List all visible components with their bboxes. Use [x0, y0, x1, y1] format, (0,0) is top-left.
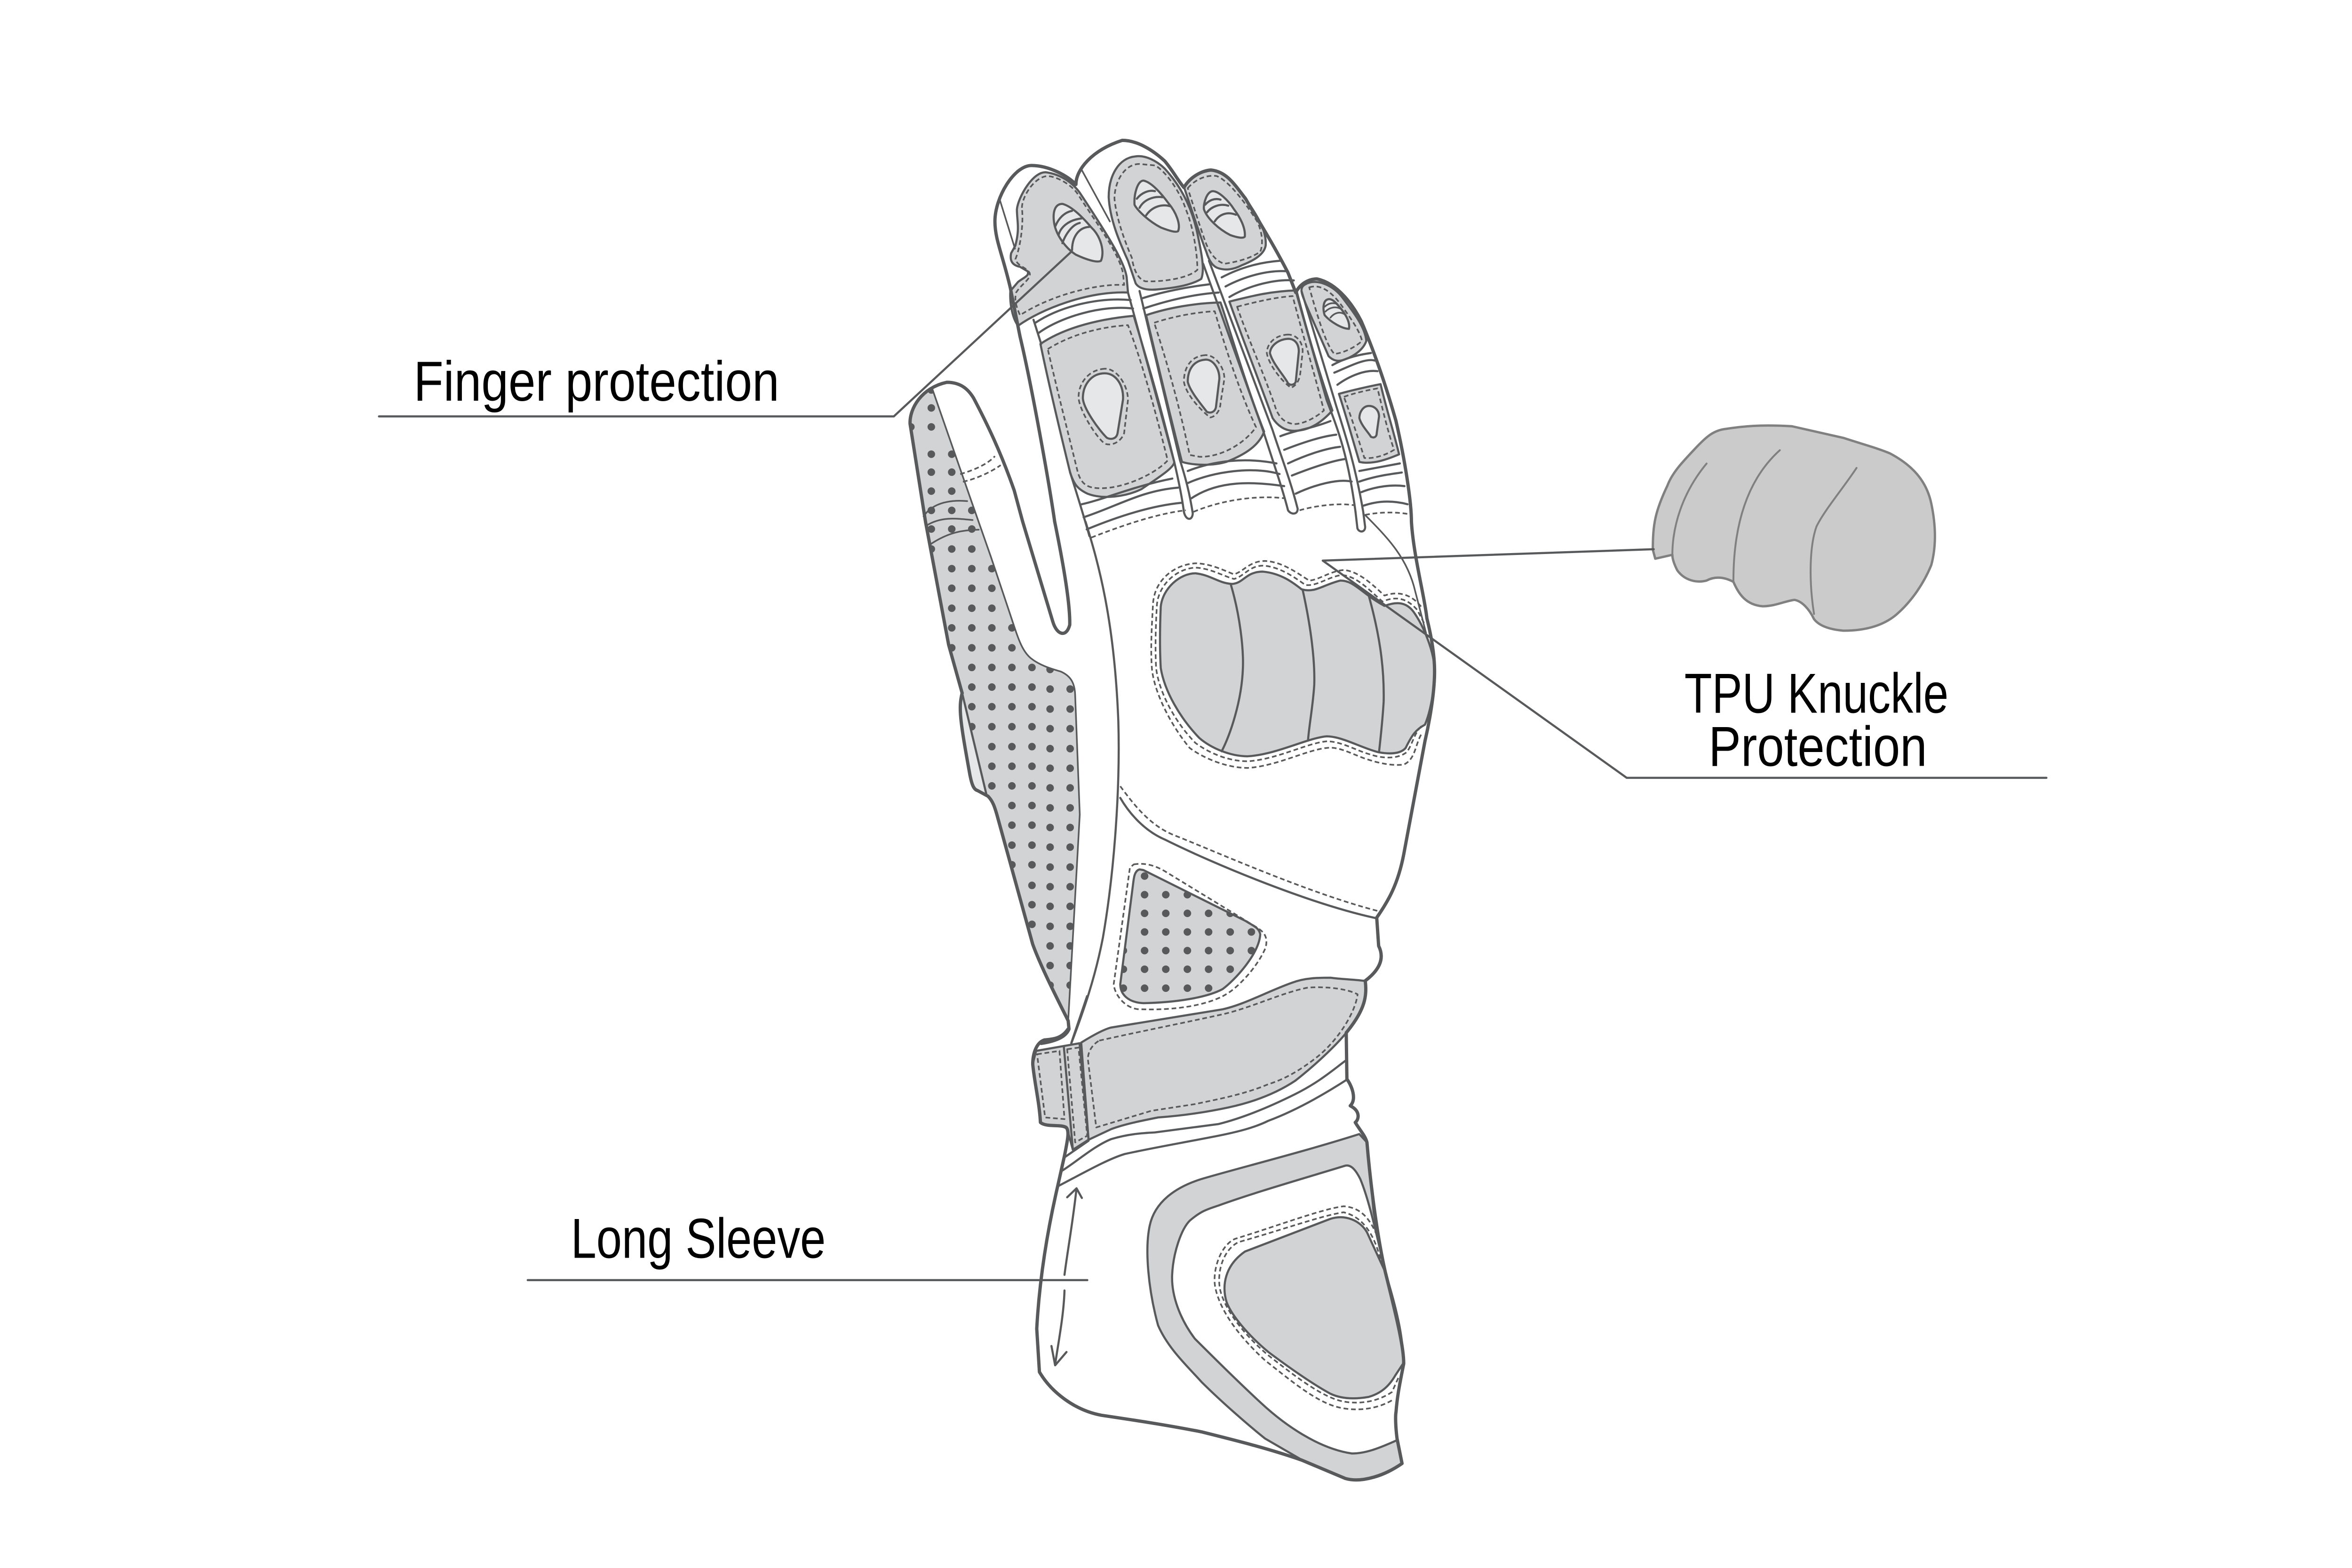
- wrist strap and gauntlet: [1033, 978, 1404, 1480]
- palm and side contour lines: [1071, 522, 1119, 1044]
- leader: finger protection: [379, 252, 1071, 416]
- palm vent panel: [1114, 864, 1266, 1009]
- finger ribs and slits: [1000, 168, 1409, 538]
- length arrow: [1051, 1188, 1082, 1365]
- label: TPU Knuckle Protection: Protection: [1708, 715, 1927, 778]
- finger tip guard: index: [1010, 172, 1128, 326]
- finger panel: little: [1339, 384, 1399, 463]
- finger outline: [995, 140, 1411, 522]
- knuckle guard: [1151, 561, 1435, 768]
- wrist strap: [1033, 978, 1366, 1150]
- thumb outline: [910, 382, 1070, 693]
- leader: long sleeve: [528, 1279, 1087, 1281]
- wrist seam: [1120, 786, 1381, 919]
- gauntlet palm pad: [1215, 1206, 1403, 1410]
- finger panel: index: [1041, 316, 1174, 497]
- label: TPU Knuckle Protection: [1685, 662, 1948, 778]
- finger tip guard: little: [1302, 282, 1367, 361]
- gauntlet bands: [1058, 1061, 1348, 1186]
- thumb perforation dots: [911, 390, 1070, 985]
- thumb with perforated panel: [910, 389, 1080, 1021]
- finger tip guard: ring: [1184, 171, 1266, 269]
- fist detail: TPU knuckle protection: [1653, 426, 1935, 631]
- hand outer edge: [1342, 522, 1435, 984]
- gauntlet gray ring: [1147, 1134, 1402, 1480]
- strap tab and gauntlet outline: [1033, 1029, 1404, 1480]
- glove illustration: [910, 140, 1435, 1480]
- finger panel: ring: [1230, 290, 1332, 431]
- label: Long Sleeve: Long Sleeve: [571, 1207, 826, 1270]
- glove fingers: [995, 140, 1411, 538]
- leader: TPU knuckle protection: [1323, 549, 2046, 778]
- glove back of hand: [910, 382, 1435, 1044]
- label: Finger protection: Finger protection: [413, 349, 779, 413]
- finger tip guard: middle: [1109, 156, 1203, 290]
- label: TPU Knuckle Protection: TPU Knuckle: [1685, 662, 1948, 725]
- finger panel: middle: [1146, 302, 1264, 465]
